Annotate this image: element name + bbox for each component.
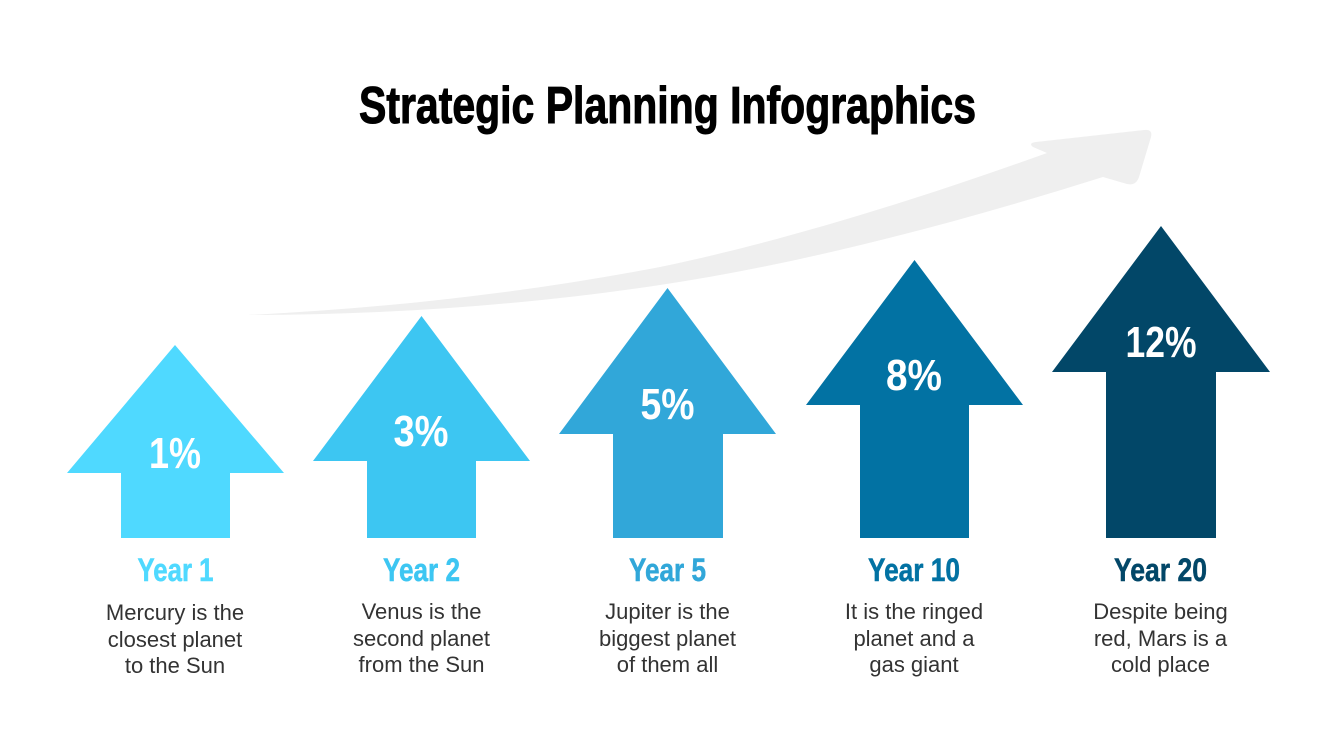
title: Strategic Planning Infographics xyxy=(359,77,976,135)
value: 12%: 12% xyxy=(1126,318,1196,367)
heading: Year 10: Year 10 xyxy=(868,552,960,588)
column: year 2 xyxy=(313,316,530,677)
description: Mercury: closest planet xyxy=(108,627,242,652)
description: Jupiter: of them all xyxy=(617,652,718,677)
description: Venus: Venus is the xyxy=(362,599,481,624)
description: Mercury: to the Sun xyxy=(125,653,225,678)
value: 5%: 5% xyxy=(640,380,694,429)
heading: Year 5: Year 5 xyxy=(629,552,706,588)
icon: large gray growth arrow xyxy=(248,130,1151,315)
column: year 1 xyxy=(67,345,284,678)
description: Jupiter: biggest planet xyxy=(599,626,736,651)
description: ringed planet: gas giant xyxy=(869,652,959,677)
arrow: year 20 xyxy=(1052,226,1270,538)
description: Mars: Despite being xyxy=(1093,599,1228,624)
column: year 5 xyxy=(559,288,776,677)
heading: Year 20: Year 20 xyxy=(1114,552,1207,588)
description: Venus: from the Sun xyxy=(359,652,484,677)
description: Jupiter: Jupiter is the xyxy=(605,599,730,624)
column: year 20 xyxy=(1052,226,1270,677)
heading: Year 1: Year 1 xyxy=(138,552,214,588)
column: year 10 xyxy=(806,260,1023,677)
description: Mercury: Mercury is the xyxy=(106,600,244,625)
description: Venus: second planet xyxy=(353,626,490,651)
description: Mars: cold place xyxy=(1111,652,1210,677)
arrow: year 5 xyxy=(559,288,776,538)
description: Mars: red, Mars is a xyxy=(1094,626,1228,651)
arrow: year 2 xyxy=(313,316,530,538)
description: ringed planet: It is the ringed xyxy=(845,599,983,624)
heading: Year 2: Year 2 xyxy=(383,552,460,588)
value: 1%: 1% xyxy=(149,429,201,478)
description: ringed planet: planet and a xyxy=(853,626,975,651)
value: 3%: 3% xyxy=(394,407,448,456)
arrow: year 10 xyxy=(806,260,1023,538)
value: 8%: 8% xyxy=(886,351,942,400)
arrow: year 1 xyxy=(67,345,284,538)
